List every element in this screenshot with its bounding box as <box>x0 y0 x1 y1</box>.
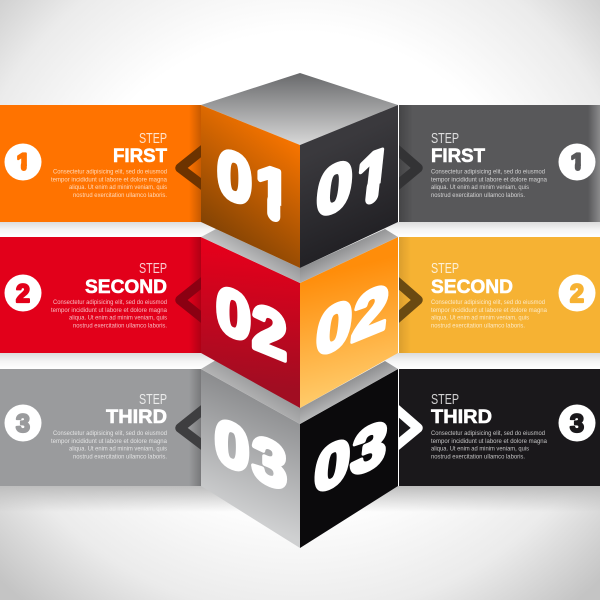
panel: step third left <box>0 369 201 486</box>
step label: STEP <box>139 391 167 408</box>
cube number right: 1 <box>352 132 395 220</box>
body text: aliqua. Ut enim ad minim veniam, quis <box>431 184 530 191</box>
number badge <box>4 144 42 180</box>
heading: SECOND <box>431 276 513 298</box>
number badge <box>4 274 42 312</box>
cube number left <box>217 149 282 222</box>
cube number right <box>311 406 391 507</box>
number badge <box>558 144 596 180</box>
body text: tempor incididunt ut labore et dolore magna <box>431 176 547 184</box>
cube number left: 3 <box>252 421 287 504</box>
body text: Consectetur adipisicing elit, sed do eiusmod <box>53 430 167 437</box>
body text: nostrud exercitation ullamco laboris. <box>431 192 525 199</box>
body text <box>431 299 547 330</box>
body text: tempor incididunt ut labore et dolore magna <box>51 438 167 445</box>
cube number right: 3 <box>348 406 391 490</box>
number badge: 3 <box>570 410 584 438</box>
number badge <box>4 404 42 442</box>
body text: tempor incididunt ut labore et dolore magna <box>431 438 547 445</box>
step label: STEP <box>431 260 459 277</box>
cube 03 <box>201 360 398 548</box>
heading: FIRST <box>431 145 485 167</box>
body text: Consectetur adipisicing elit, sed do eiusmod <box>431 168 545 176</box>
body text: tempor incididunt ut labore et dolore magna <box>51 176 167 184</box>
cube number right: 2 <box>349 270 392 357</box>
body text: nostrud exercitation ullamco laboris. <box>73 454 167 460</box>
cube number left: 2 <box>252 289 287 376</box>
cube number left <box>216 271 287 376</box>
body text <box>431 430 547 460</box>
body text: Consectetur adipisicing elit, sed do eiusmod <box>53 168 167 176</box>
panel: step second right <box>399 237 600 353</box>
step label: STEP <box>431 130 459 147</box>
number badge: 2 <box>16 280 30 308</box>
number badge: 1 <box>17 149 31 177</box>
body text: nostrud exercitation ullamco laboris. <box>73 192 167 199</box>
body text: tempor incididunt ut labore et dolore magna <box>51 307 167 314</box>
chevron arrows <box>180 148 418 447</box>
cube number left: 0 <box>216 271 251 358</box>
cube number left: 1 <box>255 149 291 237</box>
body text: tempor incididunt ut labore et dolore magna <box>431 307 547 314</box>
cube number right: 0 <box>313 145 356 233</box>
body text: aliqua. Ut enim ad minim veniam, quis <box>431 446 530 452</box>
cube number right: 0 <box>312 285 355 372</box>
cube number left: 0 <box>214 404 250 487</box>
number badge <box>558 274 596 312</box>
body text: aliqua. Ut enim ad minim veniam, quis <box>69 446 168 452</box>
step label: STEP <box>139 260 167 277</box>
step label: STEP <box>431 391 459 408</box>
step label: STEP <box>139 130 167 147</box>
number badge: 1 <box>571 149 585 177</box>
number badge: 3 <box>16 410 30 438</box>
panel: step first left <box>0 105 201 222</box>
body text <box>431 168 547 199</box>
cube 01 <box>201 73 398 268</box>
number badge: 2 <box>570 280 584 308</box>
heading: FIRST <box>113 145 167 167</box>
heading: SECOND <box>85 276 167 298</box>
cube number right <box>316 148 384 216</box>
body text: aliqua. Ut enim ad minim veniam, quis <box>431 314 530 322</box>
body text: nostrud exercitation ullamco laboris. <box>431 322 525 330</box>
body text: Consectetur adipisicing elit, sed do eiusmod <box>431 430 545 437</box>
cube number left: 0 <box>217 134 252 221</box>
panel: step second left <box>0 237 201 353</box>
body text: Consectetur adipisicing elit, sed do eiusmod <box>53 299 167 306</box>
body text: aliqua. Ut enim ad minim veniam, quis <box>69 314 168 322</box>
cube number right <box>312 270 392 372</box>
shadow gaps between bands <box>0 222 600 512</box>
cube number right: 0 <box>311 424 354 507</box>
panel: step first right <box>399 105 600 222</box>
body text: nostrud exercitation ullamco laboris. <box>73 322 167 330</box>
body text <box>51 299 168 330</box>
body text <box>51 430 168 460</box>
panel: step third right <box>399 369 600 486</box>
cube number left <box>214 404 287 504</box>
heading: THIRD <box>431 406 492 428</box>
body text: aliqua. Ut enim ad minim veniam, quis <box>69 184 168 191</box>
body text: nostrud exercitation ullamco laboris. <box>431 454 525 460</box>
number badge <box>558 404 596 442</box>
body text <box>51 168 168 199</box>
cube 02 <box>201 229 398 408</box>
body text: Consectetur adipisicing elit, sed do eiusmod <box>431 299 545 306</box>
heading: THIRD <box>106 406 167 428</box>
